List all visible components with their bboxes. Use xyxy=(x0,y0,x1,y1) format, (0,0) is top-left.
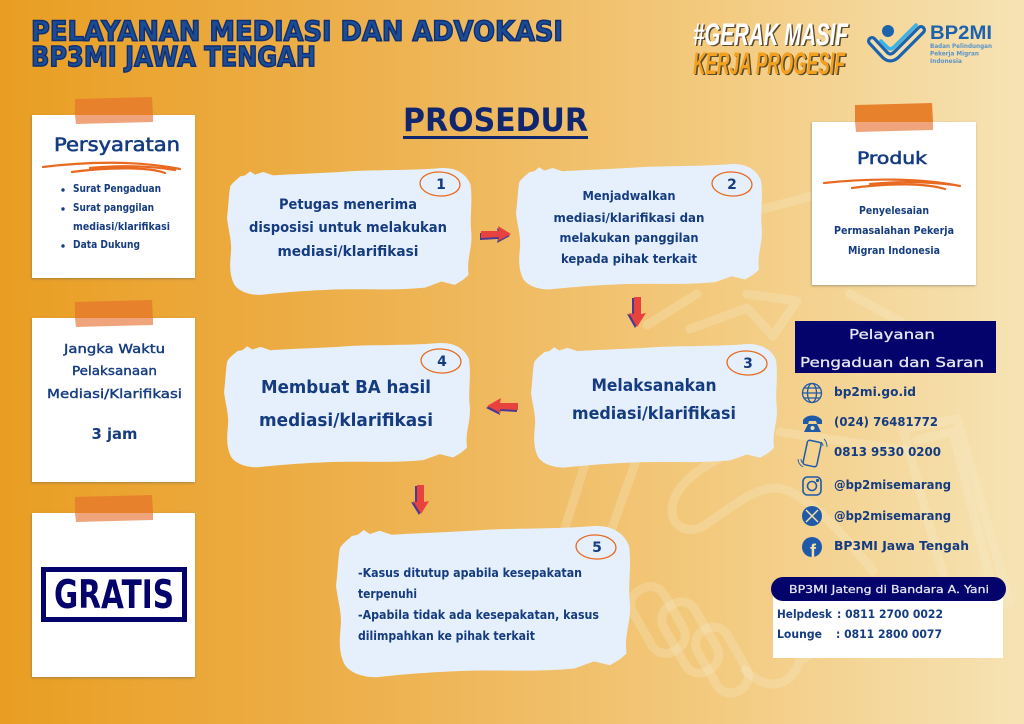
badge: 1 xyxy=(436,177,446,193)
helpdesk: Lounge xyxy=(777,627,822,641)
logo text: Indonesia xyxy=(930,58,962,65)
badge xyxy=(726,350,768,376)
title: BP3MI JAWA TENGAH xyxy=(31,41,316,73)
title: PELAYANAN MEDIASI DAN ADVOKASI xyxy=(31,16,563,48)
text xyxy=(572,376,736,423)
text: Migran Indonesia xyxy=(848,244,940,257)
panel: jangka waktu xyxy=(32,300,195,482)
logo text: BP2MI xyxy=(930,23,992,44)
duration: 3 jam xyxy=(92,425,138,443)
text: Mediasi/Klarifikasi xyxy=(47,386,182,401)
tape xyxy=(75,300,153,327)
panel: bandara xyxy=(771,577,1006,658)
stamp: GRATIS xyxy=(54,573,174,618)
heading: prosedur: PROSEDUR xyxy=(403,101,588,139)
icon: telephone xyxy=(803,416,822,432)
tape xyxy=(75,495,153,522)
mobile number: 0813 9530 0200 xyxy=(834,444,941,459)
text: mediasi/klarifikasi xyxy=(572,404,736,423)
logo text: Pekerja Migran xyxy=(930,50,979,58)
badge xyxy=(419,171,461,197)
campaign slogan: KERJA PROGESIF xyxy=(694,46,847,82)
campaign slogan: KERJA PROGESIF xyxy=(693,45,845,81)
panel: pelayanan pengaduan dan saran: Pelayanan xyxy=(849,327,935,343)
text: Penyelesaian xyxy=(859,204,929,217)
text: -Kasus ditutup apabila kesepakatan xyxy=(358,565,582,580)
list: Surat Pengaduan xyxy=(73,183,161,195)
text: Pelaksanaan xyxy=(72,363,157,378)
list xyxy=(61,183,170,251)
x handle: @bp2misemarang xyxy=(834,508,951,523)
text: mediasi/klarifikasi xyxy=(259,411,433,431)
text xyxy=(554,188,704,266)
icon: globe xyxy=(802,384,822,402)
step 4 xyxy=(224,343,470,467)
text xyxy=(259,378,433,431)
icon: facebook: f xyxy=(810,541,817,561)
arrow: step 1 to 2 xyxy=(480,226,511,243)
instagram handle: @bp2misemarang xyxy=(834,477,951,492)
icon: x xyxy=(802,506,822,526)
text: disposisi untuk melakukan xyxy=(249,220,447,236)
logo text: Badan Pelindungan xyxy=(930,43,992,50)
logo mark xyxy=(872,25,921,58)
list: Data Dukung xyxy=(73,239,140,251)
panel: produk xyxy=(812,103,976,285)
text: -Apabila tidak ada kesepakatan, kasus xyxy=(358,607,599,622)
text: melakukan panggilan xyxy=(560,230,698,245)
arrow: step 2 to 3 xyxy=(627,297,646,328)
text xyxy=(358,565,599,643)
panel: bandara: BP3MI Jateng di Bandara A. Yani xyxy=(789,584,989,596)
step 5 xyxy=(336,526,630,677)
underline xyxy=(43,163,180,173)
list: Surat panggilan xyxy=(73,202,154,214)
text: Permasalahan Pekerja xyxy=(834,224,954,237)
panel: persyaratan xyxy=(32,97,195,278)
text: dilimpahkan ke pihak terkait xyxy=(358,628,535,643)
panel: pelayanan pengaduan dan saran xyxy=(795,321,996,373)
logo text xyxy=(930,23,992,65)
text: terpenuhi xyxy=(358,586,417,601)
tape xyxy=(855,103,933,132)
text: mediasi/klarifikasi xyxy=(278,244,418,260)
text: Menjadwalkan xyxy=(582,188,676,203)
underline xyxy=(824,180,960,189)
contact list xyxy=(798,384,969,561)
helpdesk: Helpdesk xyxy=(777,607,832,621)
website: bp2mi.go.id xyxy=(834,384,916,399)
text xyxy=(47,341,182,401)
BP2MI logo xyxy=(872,23,992,65)
panel: gratis xyxy=(32,495,195,677)
phone: (024) 76481772 xyxy=(834,414,938,429)
step 1 xyxy=(227,168,471,295)
header pill xyxy=(771,577,1006,601)
heading: Produk xyxy=(857,149,927,169)
campaign slogan xyxy=(693,16,850,82)
text: kepada pihak terkait xyxy=(561,251,697,266)
badge: 4 xyxy=(437,354,447,370)
facebook name: BP3MI Jawa Tengah xyxy=(834,538,969,553)
badge: 2 xyxy=(727,177,737,193)
campaign slogan: #GERAK MASIF xyxy=(693,16,848,52)
badge xyxy=(711,171,753,197)
helpdesk xyxy=(777,607,943,641)
arrow: step 3 to 4 xyxy=(486,398,518,415)
text: mediasi/klarifikasi dan xyxy=(554,210,704,225)
step 2 xyxy=(516,164,762,289)
text: Membuat BA hasil xyxy=(261,378,431,398)
title xyxy=(31,16,563,73)
text: Jangka Waktu xyxy=(63,341,165,356)
tape xyxy=(75,97,153,124)
badge: 5 xyxy=(592,540,602,556)
icon: instagram xyxy=(803,477,821,495)
badge xyxy=(420,348,462,374)
icon: mobile xyxy=(798,439,827,467)
helpdesk: : 0811 2700 0022 xyxy=(837,607,943,621)
text: Melaksanakan xyxy=(592,376,716,395)
arrow: step 4 to 5 xyxy=(411,485,429,515)
text xyxy=(249,197,447,260)
campaign slogan: #GERAK MASIF xyxy=(694,17,850,53)
step 3 xyxy=(531,344,777,468)
text: Petugas menerima xyxy=(279,197,417,213)
icon: facebook xyxy=(802,537,822,561)
list: mediasi/klarifikasi xyxy=(73,221,170,233)
panel: pelayanan pengaduan dan saran: Pengaduan dan Saran xyxy=(800,355,984,371)
heading: Persyaratan xyxy=(54,135,180,156)
text xyxy=(834,204,954,257)
badge: 3 xyxy=(743,356,753,372)
helpdesk: : 0811 2800 0077 xyxy=(836,627,942,641)
badge xyxy=(575,534,617,560)
